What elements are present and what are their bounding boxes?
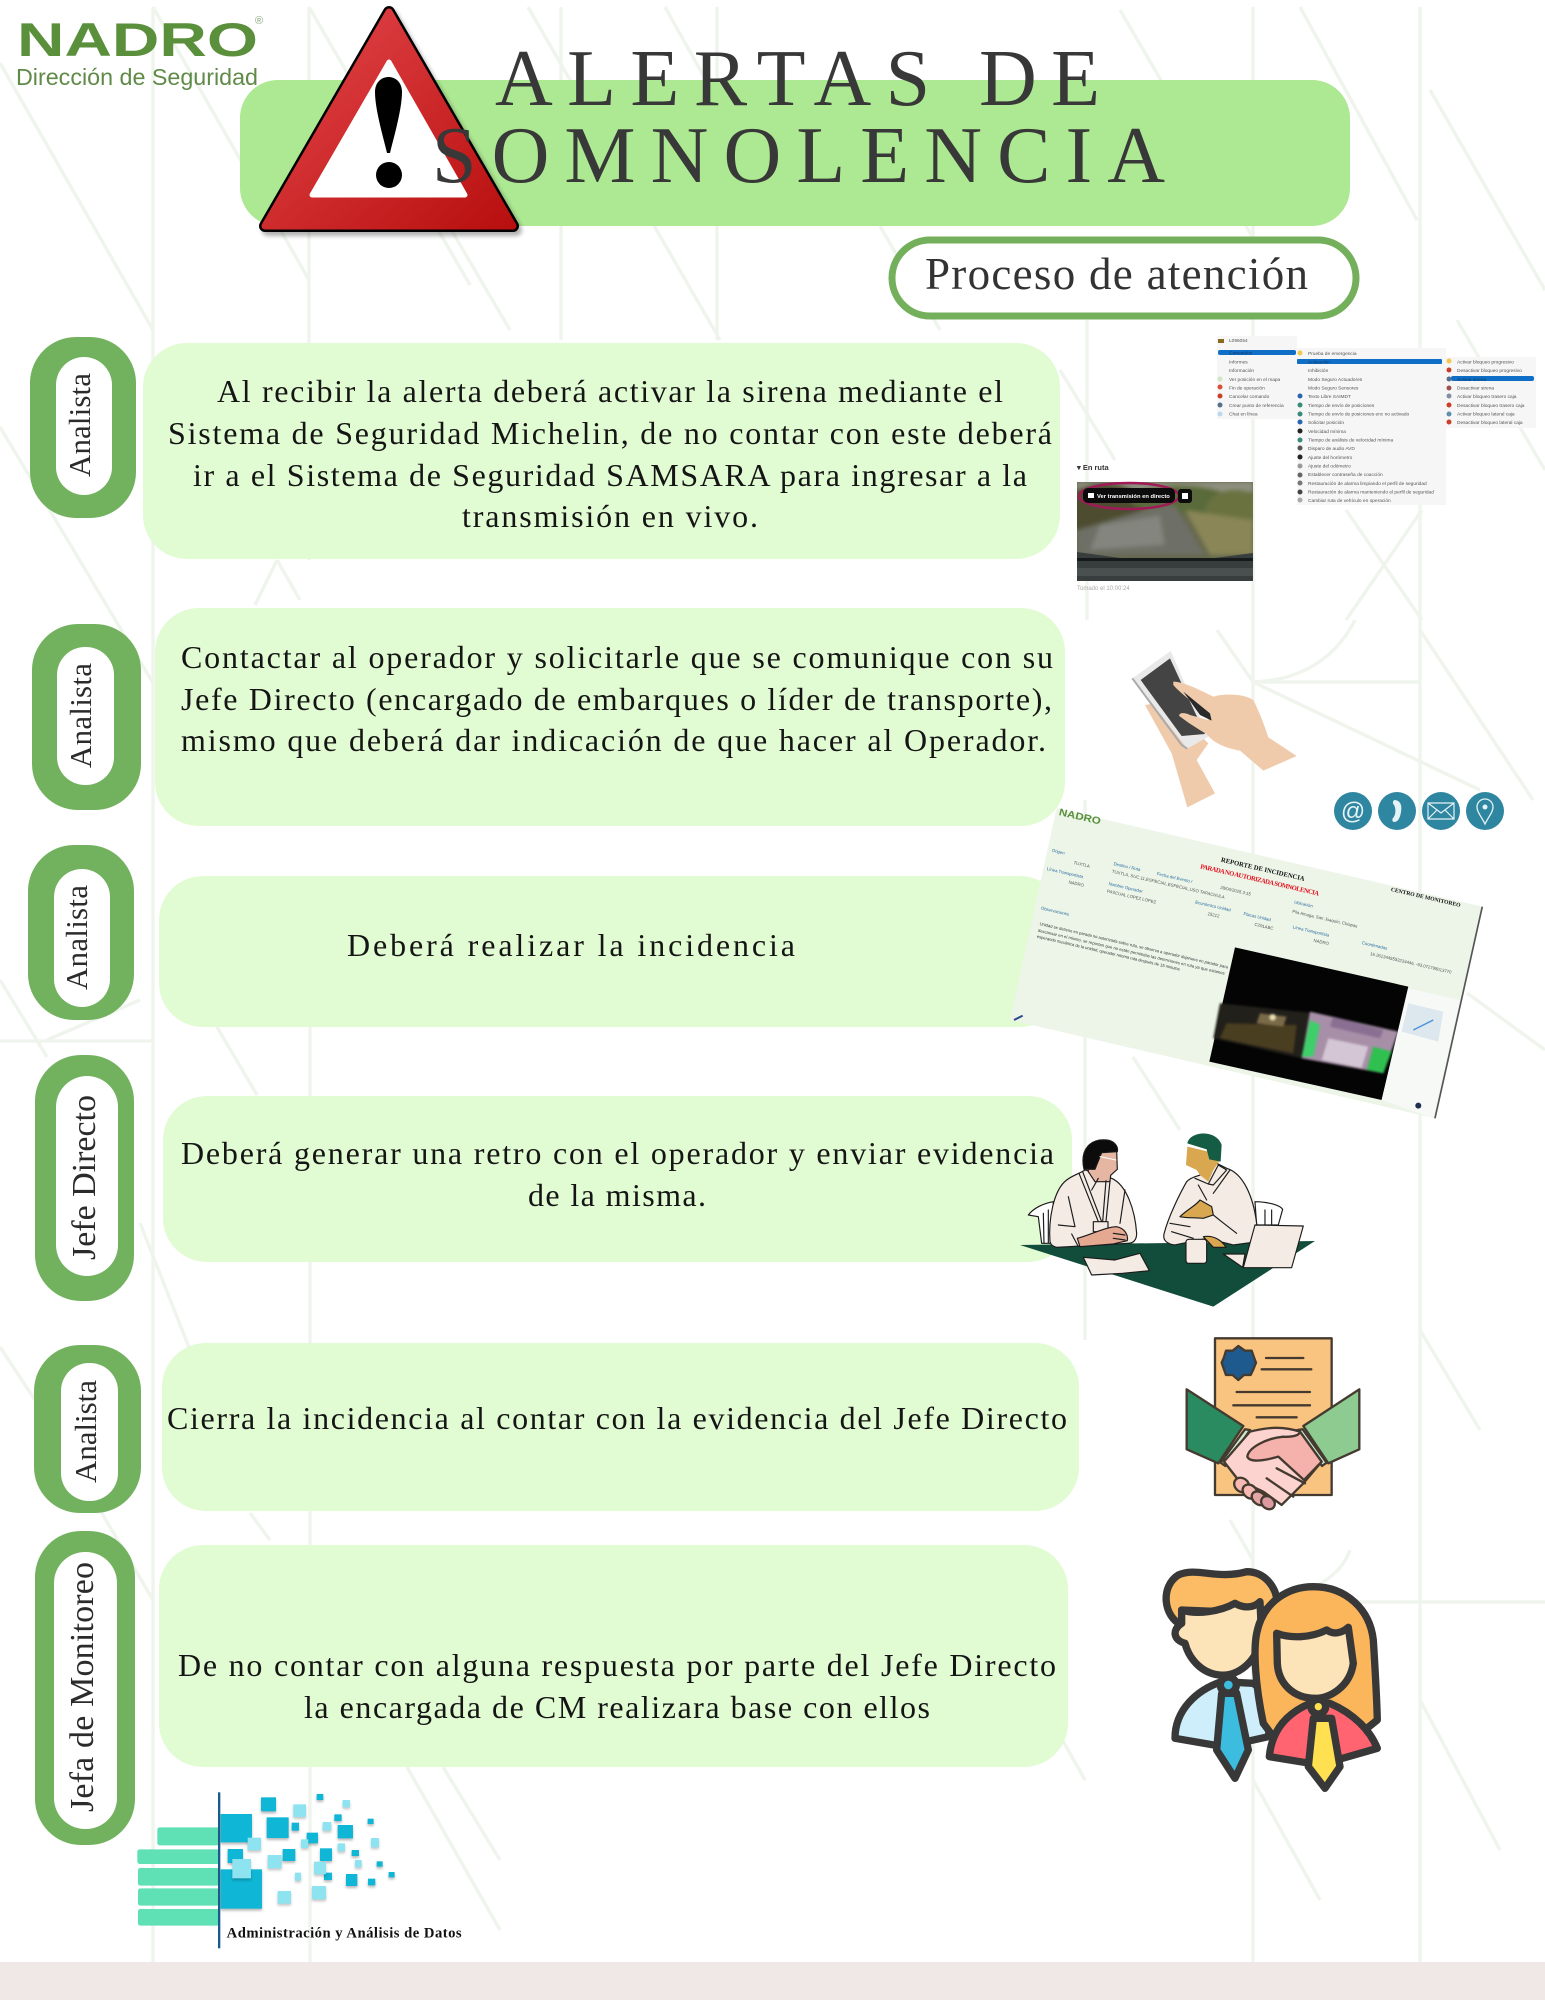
role label: Analista: Analista: [62, 373, 97, 477]
panel: step 4: [35, 1055, 1072, 1301]
step 2 bubble: mismo que deberá dar indicación de que hacer al Operador.: [181, 722, 1046, 758]
bottom band: [0, 1962, 1545, 2000]
screenshot: command menus: Activar bloqueo lateral caja: [1457, 412, 1515, 418]
icon: at sign: [1334, 792, 1372, 830]
screenshot: command menus: Informes: [1229, 360, 1248, 366]
screenshot: incident report: 15212: [1207, 911, 1221, 919]
role label: Analista: [32, 624, 141, 810]
screenshot: command menus: Tiempo de envío de posiciones: [1308, 403, 1375, 409]
screenshot: command menus: Activar bloqueo progresivo: [1457, 360, 1514, 366]
screenshot: incident report: Coordenadas: [1361, 940, 1388, 951]
icon: two people: [1166, 1572, 1377, 1788]
subtitle pill: Proceso de atención: [925, 249, 1308, 299]
step 1 bubble: ir a el Sistema de Seguridad SAMSARA para ingresar a la: [193, 457, 1027, 493]
step 2 bubble: Jefe Directo (encargado de embarques o líder de transporte),: [181, 681, 1052, 717]
step 3 bubble: Deberá realizar la incidencia: [347, 927, 795, 963]
role label: Analista: Analista: [59, 885, 94, 990]
step 4 bubble: Deberá generar una retro con el operador y enviar evidencia: [181, 1135, 1054, 1171]
screenshot: command menus: Modo Seguro Actuadores: [1308, 377, 1363, 383]
icon: agreement handshake: [1187, 1338, 1359, 1512]
mug: [1186, 1239, 1207, 1263]
screenshot: command menus: Cambiar ruta de vehículo en operación: [1308, 498, 1391, 504]
screenshot: incident report: Destino / Ruta: [1113, 861, 1142, 872]
logo: NADRO: Dirección de Seguridad: [16, 64, 258, 90]
screenshot: command menus: Activar sirena: [1457, 377, 1486, 383]
screenshot: incident report: NADRO: [1068, 879, 1085, 888]
screenshot: incident report: Pila Amaga, San Joaquín, Chiapas: [1292, 909, 1358, 929]
illustration: two people at a table: [1020, 1134, 1315, 1307]
screenshot: incident report: Económico Unidad: [1195, 899, 1232, 913]
screenshot: command menus: Desactivar bloqueo progresivo: [1457, 368, 1522, 374]
step 1 bubble: Sistema de Seguridad Michelin, de no contar con este deberá: [168, 415, 1052, 451]
panel: step 2: [32, 608, 1065, 826]
step 6 bubble: la encargada de CM realizara base con ellos: [304, 1689, 930, 1725]
step 5 bubble: Cierra la incidencia al contar con la evidencia del Jefe Directo: [167, 1400, 1067, 1436]
screenshot: incident report: 28/04/2025 3:15: [1220, 885, 1252, 897]
icon: phone: [1378, 792, 1416, 830]
screenshot: incident report: Origen: [1051, 848, 1066, 856]
screenshot: command menus: Modo Seguro Sensores: [1308, 386, 1359, 392]
screenshot: incident report: C291ABC: [1254, 922, 1274, 931]
screenshot: incident report: Ubicación: [1294, 899, 1314, 909]
screenshot: command menus: Información: [1229, 368, 1254, 374]
screenshot: incident report: PARADA NO AUTORIZADA SOMNOLENCIA: [1200, 863, 1320, 898]
screenshot: command menus: Velocidad mínima: [1308, 429, 1346, 435]
role label: Jefe Directo: [35, 1055, 134, 1301]
screenshot: command menus: Disparo de audio AVD: [1308, 446, 1355, 452]
screenshot: command menus: Chat en línea: [1229, 412, 1258, 418]
hands: [1224, 1428, 1322, 1505]
icon: at sign: @: [1341, 798, 1365, 825]
open book: [1083, 1253, 1149, 1275]
woman: [1255, 1587, 1377, 1788]
title: ALERTAS DE: [495, 35, 1100, 123]
subtitle pill: [892, 240, 1356, 316]
step 4 bubble: [163, 1096, 1072, 1262]
screenshot: incident report: Nombre Operador: [1108, 881, 1144, 894]
role label: Analista: Analista: [63, 663, 98, 768]
step 2 bubble: [155, 608, 1065, 826]
screenshot: incident report: Línea Transportista: [1292, 924, 1330, 938]
panel: step 6: [35, 1531, 1068, 1845]
screenshot: incident report: CENTRO DE MONITOREO: [1390, 887, 1462, 909]
screenshot: incident report: esperando mecánica de la unidad, operador retoma ruta después de 15 minutos: [1036, 934, 1180, 972]
logo: NADRO: [16, 13, 263, 90]
screenshot: command menus: Cancelar comando: [1229, 394, 1270, 400]
screenshot: incident report: REPORTE DE INCIDENCIA: [1220, 857, 1305, 883]
panel: step 5: [34, 1343, 1079, 1513]
person right: [1164, 1134, 1257, 1247]
icon: hands holding phone: [1132, 651, 1297, 807]
screenshot: command menus: Solicitar posición: [1308, 420, 1344, 426]
screenshot: live camera: Tomado el 10:00:24: [1077, 586, 1130, 592]
person left: [1050, 1140, 1137, 1247]
left sleeve: [1187, 1389, 1243, 1463]
icon: location pin: [1466, 792, 1504, 830]
logo: data administration: Administración y Análisis de Datos: [227, 1925, 462, 1941]
screenshot: command menus: Ajuste del odómetro: [1308, 464, 1351, 470]
screenshot: incident report: Observaciones: [1040, 905, 1070, 917]
step 1 bubble: Al recibir la alerta deberá activar la sirena mediante el: [217, 373, 1003, 409]
right sleeve: [1303, 1389, 1359, 1463]
screenshot: live camera: ▾ En ruta: [1076, 463, 1110, 472]
role label: Analista: [28, 845, 134, 1020]
role label: Analista: [30, 337, 136, 518]
screenshot: command menus: Texto Libre SAIMDT: [1308, 394, 1351, 400]
step 1 bubble: [143, 343, 1060, 559]
title: [432, 35, 1165, 200]
screenshot: command menus: Establecer contraseña de coacción: [1308, 472, 1383, 478]
screenshot: incident report: PASCUAL LOPEZ LOPEZ: [1106, 888, 1157, 905]
screenshot: command menus: L096054: [1229, 338, 1248, 344]
screenshot: incident report: Placas Unidad: [1243, 911, 1272, 922]
step 2 bubble: Contactar al operador y solicitarle que se comunique con su: [181, 639, 1053, 675]
left chair: [1028, 1202, 1053, 1243]
screenshot: incident report: Línea Transportista: [1046, 866, 1084, 879]
screenshot: command menus: Tiempo de envío de posiciones enc no activado: [1308, 412, 1409, 418]
screenshot: command menus: Activación: [1308, 360, 1330, 366]
screenshot: command menus: Ajuste del horómetro: [1308, 455, 1353, 461]
title banner: [240, 80, 1350, 226]
screenshot: command menus: Prueba de emergencia: [1308, 351, 1357, 357]
role label: Analista: [34, 1345, 141, 1513]
step 5 bubble: [162, 1343, 1079, 1511]
icon: warning triangle: [265, 12, 516, 230]
panel: step 3: [28, 845, 1064, 1027]
screenshot: command menus: Ver posición en el mapa: [1229, 377, 1281, 383]
role label: Jefa de Monitoreo: Jefa de Monitoreo: [64, 1562, 101, 1812]
screenshot: command menus: Desactivar sirena: [1457, 386, 1494, 392]
screenshot: incident report: descansar en el mismo, se reportan que no están permitidas las detenciones en ruta ya que estamos: [1037, 928, 1225, 976]
screenshot: command menus: Crear punto de referencia: [1229, 403, 1284, 409]
title: SOMNOLENCIA: [432, 112, 1165, 200]
screenshot: incident report: NADRO: [1313, 938, 1330, 946]
role label: Analista: Analista: [68, 1380, 103, 1483]
screenshot: command menus: Desactivar bloqueo lateral caja: [1457, 420, 1523, 426]
screenshot: incident report: [1010, 807, 1482, 1118]
screenshot: command menus: Comandos: [1229, 350, 1253, 356]
step 4 bubble: de la misma.: [528, 1177, 706, 1213]
screenshot: command menus: Restauración de alarma limpiando el perfil de seguridad: [1308, 481, 1427, 487]
laptop: [1223, 1225, 1303, 1268]
screenshot: command menus: [1217, 336, 1536, 505]
screenshot: incident report: TUXTLA, SUC.11,ESPECIAL,ESPECIAL,USO TAPACHULA: [1111, 869, 1225, 900]
contact icons: [1334, 792, 1504, 830]
screenshot: incident report: Unidad se detiene en parada no autorizada sobre ruta, se observa a operador dejarsere en parador para: [1039, 921, 1229, 970]
screenshot: command menus: Restauración de alarma manteniendo el perfil de seguridad: [1308, 490, 1434, 496]
step 1 bubble: transmisión en vivo.: [462, 498, 758, 534]
logo: NADRO: NADRO: [17, 13, 258, 66]
icon: envelope: [1422, 792, 1460, 830]
right chair: [1255, 1202, 1283, 1225]
screenshot: command menus: Inhibición: [1308, 368, 1329, 374]
table: [1020, 1241, 1315, 1307]
step 3 bubble: [159, 876, 1064, 1027]
step 6 bubble: De no contar con alguna respuesta por parte del Jefe Directo: [178, 1647, 1056, 1683]
step 6 bubble: [159, 1545, 1068, 1767]
role label: Jefa de Monitoreo: [35, 1531, 135, 1845]
document: [1215, 1338, 1332, 1495]
screenshot: live camera: [1063, 463, 1265, 592]
screenshot: command menus: Tiempo de análisis de velocidad mínima: [1308, 438, 1393, 444]
screenshot: live camera: Ver transmisión en directo: [1097, 494, 1170, 500]
screenshot: incident report: TUXTLA: [1073, 860, 1091, 869]
panel: step 1: [30, 337, 1060, 559]
role label: Jefe Directo: Jefe Directo: [66, 1095, 103, 1260]
screenshot: incident report: Fecha del Evento /: [1156, 871, 1193, 884]
logo: NADRO: ®: [255, 15, 263, 27]
screenshot: command menus: Activar bloqueo trasero caja: [1457, 394, 1517, 400]
screenshot: incident report: NADRO: [1058, 807, 1102, 828]
screenshot: command menus: Fin de operación: [1229, 386, 1265, 392]
screenshot: incident report: 16.2613445553234446, -93.072795013770: [1370, 951, 1453, 975]
logo: data administration: [137, 1792, 462, 1948]
seal: [1222, 1346, 1256, 1380]
screenshot: command menus: Desactivar bloqueo trasero caja: [1457, 403, 1525, 409]
man: [1166, 1572, 1277, 1778]
